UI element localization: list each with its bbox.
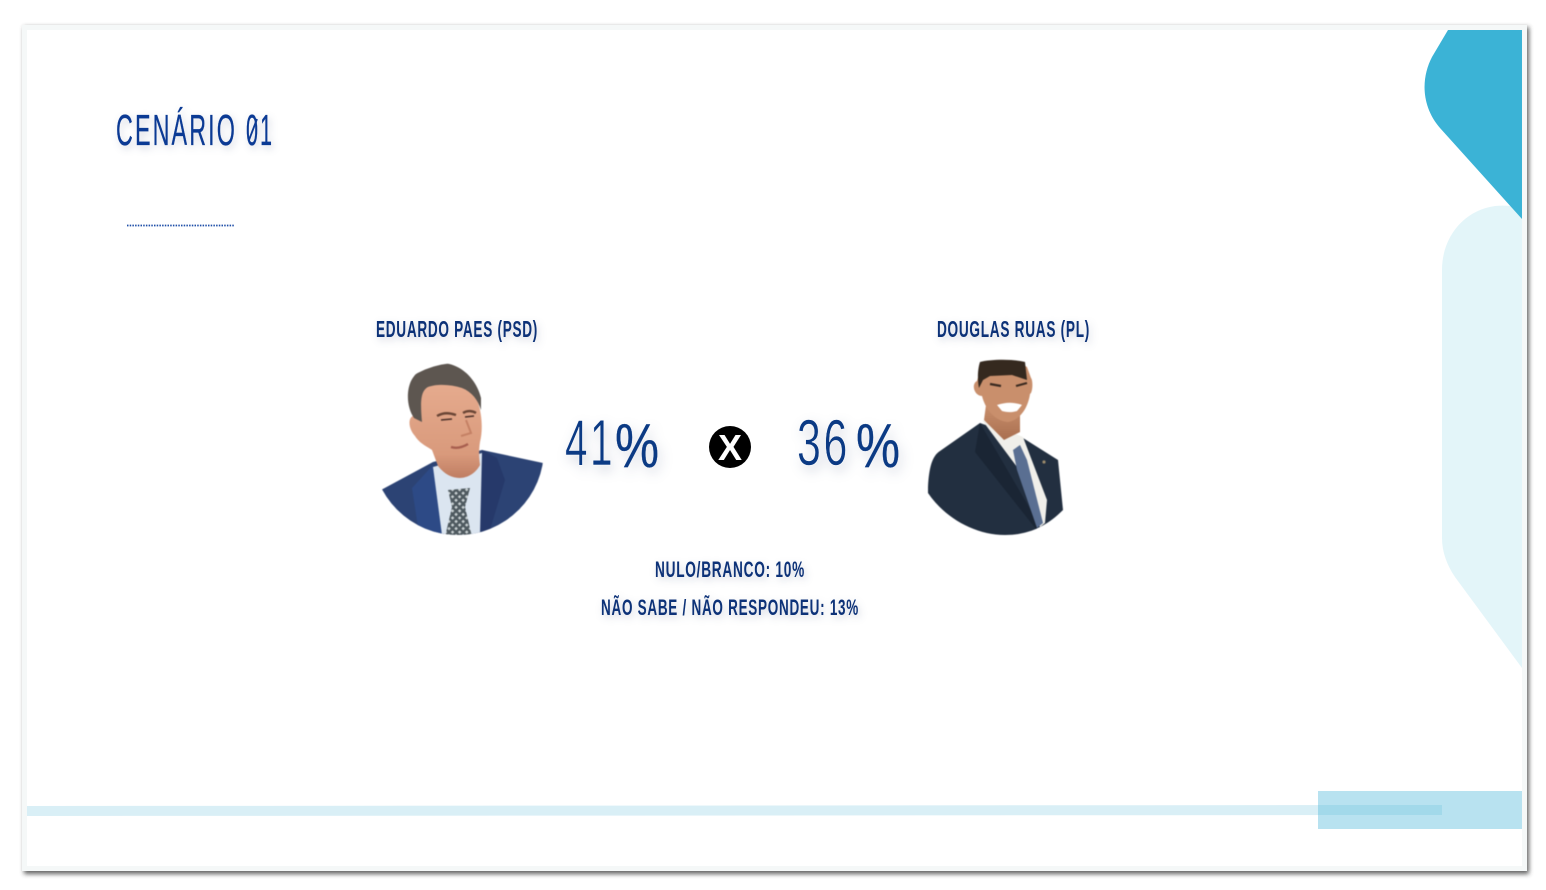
other results text: NULO/BRANCO: 10% xyxy=(655,557,805,582)
versus icon: X xyxy=(718,427,742,468)
other results text xyxy=(601,557,859,620)
candidate name: Douglas Ruas: DOUGLAS RUAS (PL) xyxy=(937,316,1090,342)
title: CENÁRIO xyxy=(116,106,237,155)
portrait: Eduardo Paes xyxy=(370,363,544,540)
versus icon xyxy=(709,426,751,468)
title xyxy=(116,106,274,155)
portrait: Douglas Ruas xyxy=(928,360,1063,535)
percentage: Ruas 36%: % xyxy=(856,412,900,481)
percentage: Paes 41%: 41 xyxy=(565,406,615,479)
other results text: NÃO SABE / NÃO RESPONDEU: 13% xyxy=(601,595,859,620)
dotted divider xyxy=(127,224,235,226)
percentage: Ruas 36%: 36 xyxy=(797,406,850,479)
decorative shape: blue corner xyxy=(1425,30,1522,219)
percentage: Paes 41%: % xyxy=(615,412,659,481)
text: 01 xyxy=(246,106,274,155)
decorative shape: pale blue panel xyxy=(1442,206,1522,668)
candidate name: Eduardo Paes: EDUARDO PAES (PSD) xyxy=(376,316,538,342)
decorative stripe: bottom band xyxy=(27,791,1522,829)
